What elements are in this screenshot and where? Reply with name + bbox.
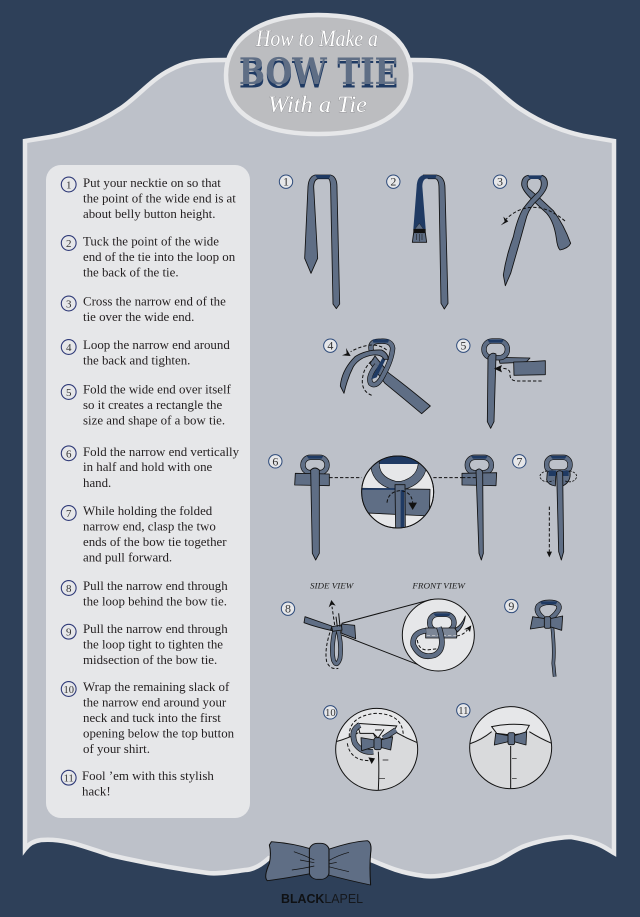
step 11 text: 11 (64, 774, 74, 785)
step 4 text: Loop the narrow end around (83, 338, 230, 352)
label: front view: FRONT VIEW (411, 581, 467, 590)
step 5 text: so it creates a rectangle the (83, 398, 222, 412)
illustration: step 6 after (462, 456, 497, 560)
step 8 text (61, 579, 228, 608)
step 6 text: 6 (66, 448, 72, 460)
step 8 text: the loop behind the bow tie. (83, 594, 227, 608)
illustration: step 3 (493, 175, 571, 286)
step 8 text: 8 (66, 583, 72, 595)
step 1 text: Put your necktie on so that (83, 176, 221, 190)
illustrations row 3 (281, 581, 563, 790)
illustration: step 8 front view circle (402, 599, 474, 671)
illustration: step 2 (387, 175, 448, 309)
step 11 text: hack! (82, 785, 111, 799)
illustration: step 9: 9 (508, 599, 514, 613)
illustration: step 11 (457, 704, 553, 789)
step 8 text: Pull the narrow end through (83, 579, 228, 593)
illustration: step 9 (505, 599, 563, 677)
step 7 text: narrow end, clasp the two (83, 520, 216, 534)
illustration: step 6 detail circle (361, 453, 434, 530)
step 7 text: 7 (66, 508, 72, 520)
zoom lines (342, 599, 432, 667)
step 9 text: the loop tight to tighten the (83, 637, 223, 651)
step 1 text: about belly button height. (83, 207, 215, 221)
illustration: step 1: 1 (283, 175, 289, 189)
illustration: step 4 (324, 339, 430, 414)
step 5 text (61, 382, 232, 428)
step 4 text (61, 338, 230, 368)
panel: instructions card (46, 165, 250, 818)
label: side view: SIDE VIEW (310, 581, 355, 590)
step 2 text (61, 234, 236, 280)
illustration: step 3: 3 (497, 175, 503, 189)
step 11 text (61, 769, 214, 799)
illustration: step 2: 2 (390, 175, 396, 189)
footer bow tie icon (266, 841, 371, 885)
illustration: dashed connectors (329, 476, 478, 479)
step 10 text: 10 (63, 685, 74, 696)
title: with a tie: With a Tie (268, 92, 367, 117)
step 7 text: ends of the bow tie together (83, 535, 227, 549)
step 10 text: of your shirt. (83, 742, 150, 756)
illustration: step 4: 4 (327, 339, 333, 353)
step 9 text: 9 (66, 627, 72, 639)
step 1 text (61, 176, 236, 221)
title: bow tie: BOW TIE (239, 51, 398, 93)
step 11 text: Fool ’em with this stylish (82, 769, 214, 783)
step 3 text: Cross the narrow end of the (83, 294, 226, 308)
step 2 text: Tuck the point of the wide (83, 234, 219, 248)
step 6 text: hand. (83, 476, 111, 490)
step 6 text: in half and hold with one (83, 460, 213, 474)
illustration: step 11: 11 (458, 706, 468, 717)
step 9 text: Pull the narrow end through (83, 622, 228, 636)
illustrations row 2 (269, 339, 577, 560)
title: bow tie shadow: BOW TIE (239, 54, 398, 96)
step 3 text: tie over the wide end. (83, 310, 194, 324)
step 9 text: midsection of the bow tie. (83, 653, 217, 667)
step 6 text: Fold the narrow end vertically (83, 445, 240, 459)
title: how to make a: How to Make a (255, 26, 378, 51)
step 5 text: 5 (66, 387, 72, 399)
step 7 text: and pull forward. (83, 550, 172, 564)
step 3 text: 3 (66, 298, 72, 310)
step 10 text: neck and tuck into the first (83, 711, 221, 725)
step 10 text: opening below the top button (83, 726, 235, 740)
step 2 text: end of the tie into the loop on (83, 250, 236, 264)
step 4 text: 4 (66, 342, 72, 354)
illustration: step 5: 5 (460, 339, 466, 353)
illustration: step 10 (324, 706, 418, 790)
step 5 text: size and shape of a bow tie. (83, 414, 225, 428)
step 10 text (61, 680, 235, 756)
step 9 text (61, 622, 228, 667)
step 5 text: Fold the wide end over itself (83, 382, 232, 396)
step 7 text: While holding the folded (83, 504, 213, 518)
illustration: step 8 side view: 8 (285, 602, 291, 616)
illustrations row 1 (279, 175, 571, 309)
illustration: step 6 before: 6 (272, 454, 278, 468)
title badge (226, 15, 411, 134)
step 1 text: 1 (66, 180, 71, 192)
illustration: step 1 (279, 175, 340, 309)
illustration: step 8 side view (281, 600, 356, 669)
footer logo: blacklapel: BLACKLAPEL (281, 892, 363, 906)
step 3 text (61, 294, 226, 324)
illustration: step 5 (457, 339, 545, 428)
step 2 text: 2 (66, 238, 71, 250)
step 1 text: the point of the wide end is at (83, 192, 236, 206)
step 4 text: the back and tighten. (83, 354, 190, 368)
step 10 text: the narrow end around your (83, 696, 227, 710)
step 2 text: the back of the tie. (83, 266, 179, 280)
step 6 text (61, 445, 240, 490)
step 7 text (61, 504, 227, 564)
illustration: step 10: 10 (325, 708, 336, 719)
illustration: step 7: 7 (516, 454, 522, 468)
illustration: step 6 before (269, 454, 329, 560)
illustration: step 7 (513, 454, 577, 560)
step 10 text: Wrap the remaining slack of (83, 680, 230, 694)
